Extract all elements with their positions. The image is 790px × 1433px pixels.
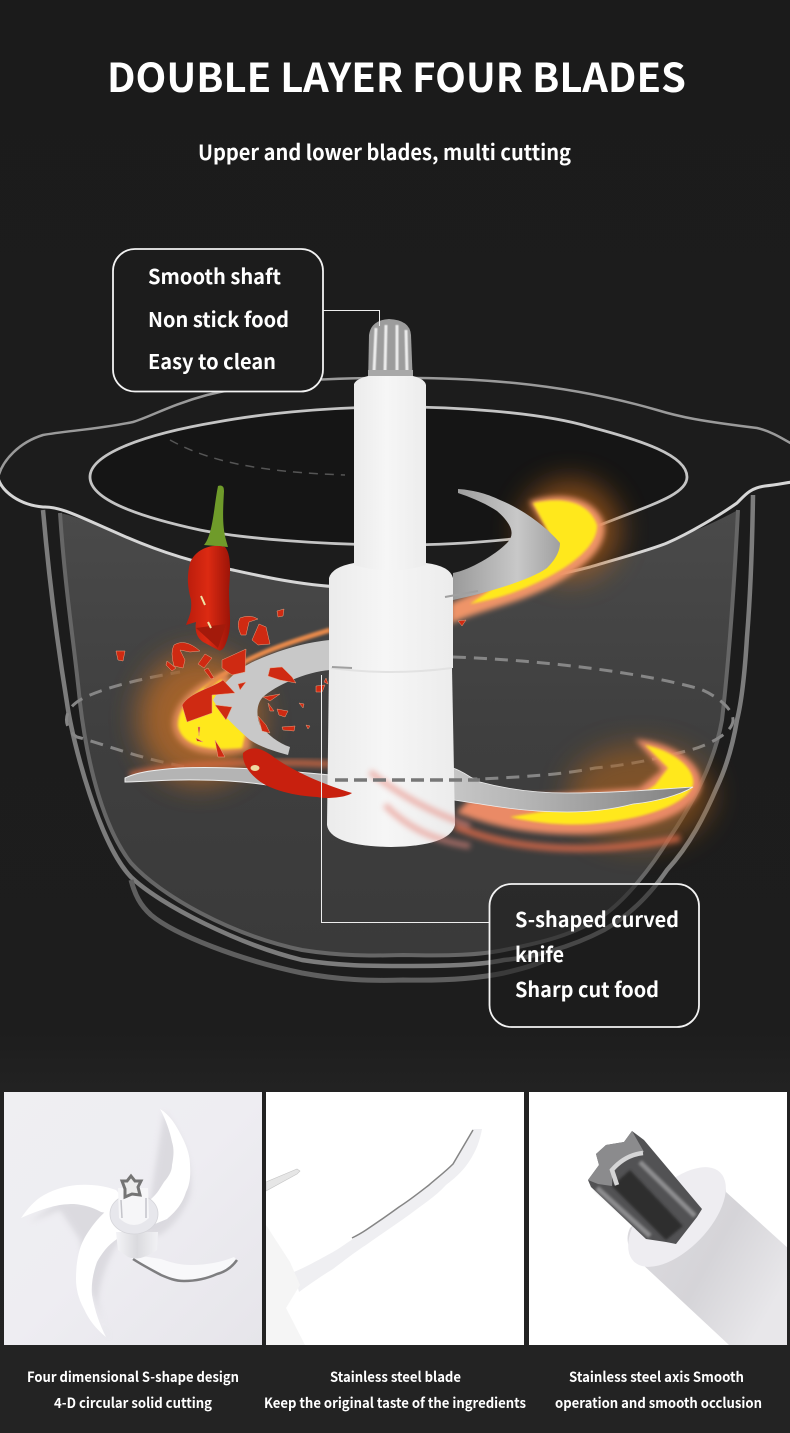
dashed lower blade orbit xyxy=(66,657,733,780)
callout leader: bottom xyxy=(322,675,489,922)
chili pepper and fragments xyxy=(116,486,466,798)
lower body xyxy=(327,668,455,847)
caption: four dimensional S-shape xyxy=(27,1367,239,1413)
lower right blade xyxy=(357,768,693,812)
steel spindle xyxy=(588,1131,702,1244)
blade: right xyxy=(132,1256,236,1280)
bowl inner wall line xyxy=(60,510,738,955)
star drive tip xyxy=(122,1176,141,1197)
callout line 3: Easy to clean xyxy=(148,345,276,375)
panel background xyxy=(4,1092,262,1345)
bowl outer wall line xyxy=(43,495,753,966)
flame glow: upper right xyxy=(520,480,620,580)
tip base xyxy=(368,319,413,389)
title: DOUBLE LAYER FOUR BLADES xyxy=(107,46,686,104)
worn highlight xyxy=(612,1153,643,1185)
flame: upper right core xyxy=(470,500,597,604)
shaft end cap xyxy=(628,1167,726,1267)
steel edge xyxy=(352,1130,473,1238)
flame: left lower streak xyxy=(130,763,330,775)
panel background xyxy=(529,1092,787,1345)
blade shaft xyxy=(327,319,480,847)
flame glow: lower right xyxy=(568,745,712,845)
callout line 2: knife xyxy=(515,938,564,968)
spindle dark channel xyxy=(612,1170,683,1240)
chili lower piece xyxy=(243,748,352,798)
hub flange xyxy=(110,1194,158,1234)
callout line 3: Sharp cut food xyxy=(515,973,659,1003)
blade sweep xyxy=(294,1129,482,1292)
small blade left xyxy=(266,1169,300,1191)
callout box xyxy=(113,249,323,392)
hub neck xyxy=(118,1188,149,1225)
panel background xyxy=(266,1092,524,1345)
flame: left upper streak xyxy=(205,630,330,690)
caption line 1: Stainless steel blade xyxy=(330,1367,461,1387)
flame: lower right core xyxy=(510,745,693,825)
tip ribs xyxy=(374,325,407,372)
blade holder tabs xyxy=(332,591,478,668)
lower left blade xyxy=(125,767,330,790)
tip nut xyxy=(368,370,413,382)
spindle ridges xyxy=(597,1162,695,1236)
flame: upper right edge xyxy=(453,499,602,620)
upper left blade xyxy=(213,640,330,755)
middle collar xyxy=(329,563,453,668)
caption line 1: Four dimensional S-shape design xyxy=(27,1367,239,1387)
callout leader: top xyxy=(324,310,380,326)
plastic shaft body xyxy=(628,1190,787,1345)
chili fragments xyxy=(116,609,466,757)
hub neck shadow xyxy=(121,1198,146,1218)
chili upper body xyxy=(186,546,230,650)
callout line 2: Non stick food xyxy=(148,303,289,333)
caption line 2: operation and smooth occlusion xyxy=(555,1393,762,1413)
callout box xyxy=(490,884,699,1027)
bowl interior xyxy=(60,510,738,955)
dashed upper orbit xyxy=(170,440,345,475)
caption line 2: Keep the original taste of the ingredients xyxy=(264,1393,526,1413)
steel drive tip xyxy=(368,319,413,389)
outer rim front lip xyxy=(0,478,790,588)
spindle end face xyxy=(588,1131,644,1186)
glass bowl illustration xyxy=(0,378,790,980)
callout line 1: Smooth shaft xyxy=(148,260,281,290)
hub lower body xyxy=(116,1232,158,1258)
upper right blade xyxy=(453,489,560,600)
outer rim top xyxy=(0,378,790,478)
motion streaks over body xyxy=(370,772,470,846)
hub base xyxy=(266,1225,305,1345)
panel: stainless steel axis photo xyxy=(529,1092,790,1345)
flame: left core xyxy=(178,678,250,749)
motion flames xyxy=(130,480,712,848)
chili stem xyxy=(204,486,228,547)
collar shadow line xyxy=(331,668,452,672)
chili seed xyxy=(250,765,260,771)
upper shaft xyxy=(354,376,426,570)
caption: stainless steel blade xyxy=(264,1367,526,1413)
callout: smooth shaft xyxy=(113,249,323,392)
blade: bottom xyxy=(76,1212,122,1336)
blade: top xyxy=(151,1110,190,1224)
blade: left xyxy=(21,1185,125,1218)
dashed line crossing shaft xyxy=(335,778,480,782)
subtitle: Upper and lower blades, multi cutting xyxy=(198,137,571,167)
caption line 1: Stainless steel axis Smooth xyxy=(569,1367,744,1387)
panel: four dimensional blade photo xyxy=(4,1092,262,1345)
blade soft shadow xyxy=(40,1117,192,1302)
chili cut end seeds xyxy=(196,624,226,648)
caption: stainless steel axis xyxy=(555,1367,762,1413)
flame: lower trailing streak xyxy=(455,826,680,848)
caption line 2: 4-D circular solid cutting xyxy=(54,1393,213,1413)
callout line 1: S-shaped curved xyxy=(515,903,679,933)
panel: stainless steel blade photo xyxy=(266,1092,524,1345)
bowl base line xyxy=(131,880,545,980)
chili highlight seed xyxy=(201,596,211,628)
blade: right steel edge xyxy=(133,1259,237,1281)
flame: lower right edge xyxy=(460,742,699,832)
blades xyxy=(125,489,693,812)
flame glow: left xyxy=(138,652,262,784)
inner rim opening xyxy=(90,407,687,545)
flame: left edge xyxy=(173,672,250,754)
callout: S-shaped knife xyxy=(490,884,699,1027)
